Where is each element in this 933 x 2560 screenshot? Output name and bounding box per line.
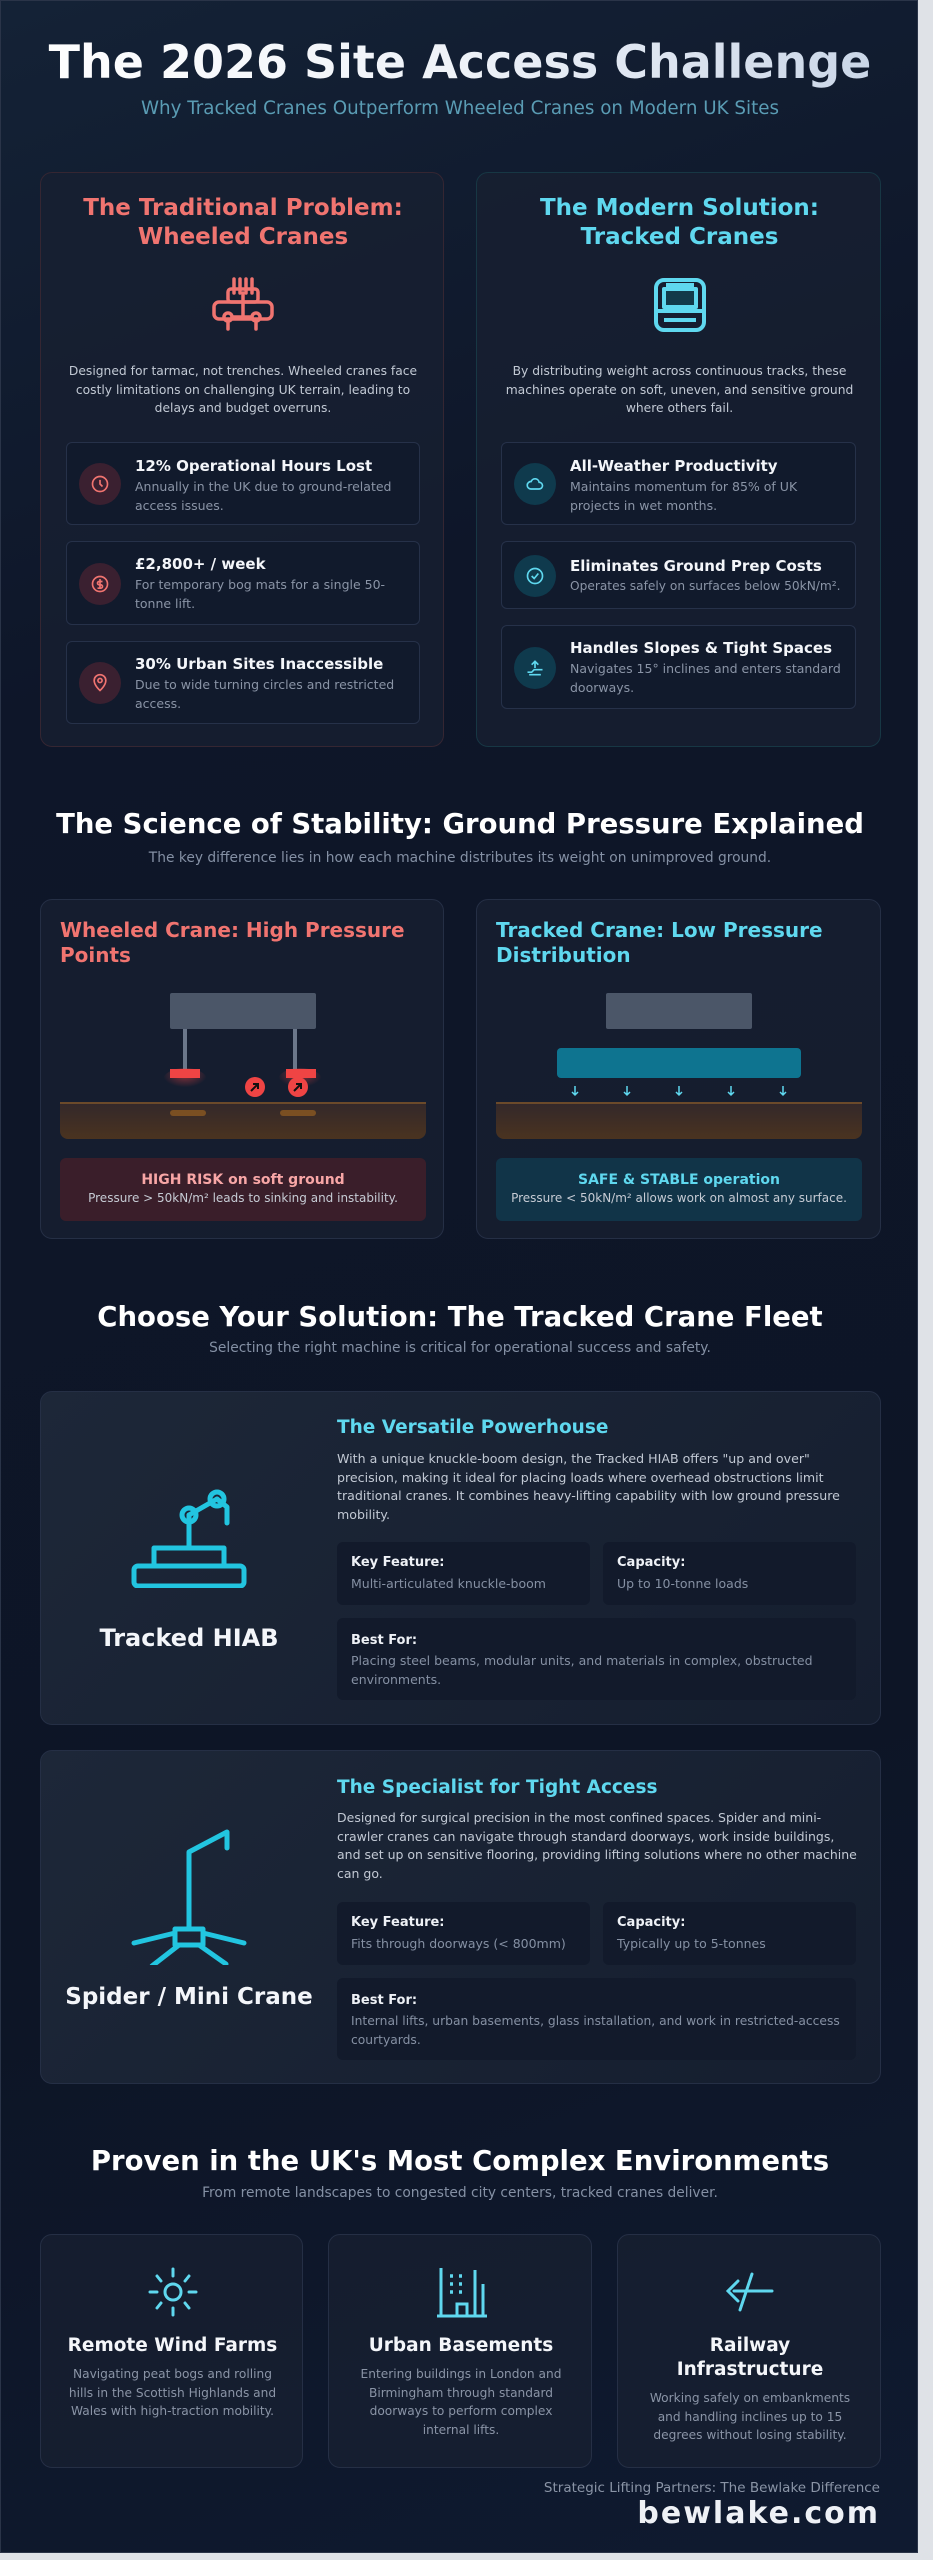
heading: fleet: Choose Your Solution: The Tracked Crane Fleet (97, 1301, 823, 1333)
spec box: capacity: Up to 10-tonne loads (617, 1576, 748, 1591)
diagram: tracked crane distribution (496, 993, 862, 1139)
spec box: best for: Best For: (351, 1993, 417, 2008)
spec box: best for (337, 1978, 856, 2060)
spec box: best for: Best For: (351, 1633, 417, 1648)
subheading: environments: From remote landscapes to congested city centers, tracked cranes deliver. (202, 2185, 718, 2201)
callout: safe and stable: Pressure < 50kN/m² allows work on almost any surface. (511, 1191, 847, 1205)
heading: modern solution: Tracked Cranes (581, 224, 778, 250)
text: railway: Working safely on embankments and handling inclines up to 15 degrees without losing stability. (650, 2391, 850, 2442)
callout: high risk: HIGH RISK on soft ground (141, 1172, 345, 1188)
heading: versatile powerhouse: The Versatile Powerhouse (337, 1417, 608, 1438)
panel: railway infrastructure (617, 2234, 881, 2468)
benefit card: slopes: Navigates 15° inclines and enters standard doorways. (570, 661, 841, 695)
benefit card: ground prep: Operates safely on surfaces below 50kN/m². (570, 579, 841, 593)
label: Tracked HIAB: Tracked HIAB (99, 1624, 278, 1652)
callout: high risk: Pressure > 50kN/m² leads to sinking and instability. (88, 1191, 398, 1205)
text: urban basements: Entering buildings in London and Birmingham through standard doorways to perform complex internal lifts. (361, 2367, 561, 2436)
text: HIAB description: With a unique knuckle-boom design, the Tracked HIAB offers "up and over" precision, making it ideal for placing loads where overhead obstructions limit traditional cranes. It combines heavy-lifting capability with low ground pressure mobility. (337, 1451, 840, 1522)
heading: tracked low pressure (496, 918, 823, 967)
stat card: bog mats cost: For temporary bog mats for a single 50-tonne lift. (135, 577, 385, 611)
panel: wheeled pressure diagram (40, 899, 444, 1239)
spec box: capacity: Typically up to 5-tonnes (617, 1936, 766, 1951)
icon: check (514, 555, 556, 597)
icon: wheeled crane (212, 277, 274, 331)
stat card: hours lost: 12% Operational Hours Lost (135, 457, 372, 475)
icon: cloud (514, 463, 556, 505)
callout: high risk (60, 1158, 426, 1221)
spec box: capacity: Capacity: (617, 1555, 685, 1570)
benefit card: all-weather: Maintains momentum for 85% of UK projects in wet months. (570, 479, 797, 513)
diagram: wheeled crane outriggers (60, 993, 426, 1139)
label: Spider / Mini Crane: Spider / Mini Crane (65, 1984, 313, 2010)
heading: science of stability: The Science of Stability: Ground Pressure Explained (56, 808, 864, 840)
title: wind farms: Remote Wind Farms (68, 2335, 277, 2356)
title: railway (677, 2335, 823, 2380)
benefit card: all-weather: All-Weather Productivity (570, 457, 778, 475)
stat card: bog mats cost (66, 541, 420, 625)
benefit card: all-weather (501, 442, 856, 525)
text: spider description: Designed for surgical precision in the most confined spaces. Spider and mini-crawler cranes can navigate through standard doorways, work inside buildings, and set up on sensitive flooring, providing lifting solutions where no other machine can go. (337, 1810, 857, 1881)
heading: tracked low pressure: Tracked Crane: Low Pressure (496, 918, 823, 942)
heading: traditional problem: Wheeled Cranes (138, 224, 348, 250)
spec box: best for: Placing steel beams, modular units, and materials in complex, obstructed environments. (351, 1653, 813, 1686)
icon: knuckle boom crane (132, 1490, 246, 1588)
heading: tight access specialist: The Specialist for Tight Access (337, 1777, 657, 1798)
spec box: key feature: Key Feature: (351, 1555, 445, 1570)
footer brand: bewlake.com (637, 2496, 880, 2531)
icon: location pin (79, 662, 121, 704)
title: railway: Infrastructure (677, 2359, 823, 2380)
panel: tracked pressure diagram (476, 899, 881, 1239)
heading: wheeled high pressure: Points (60, 943, 131, 967)
benefit card: slopes: Handles Slopes & Tight Spaces (570, 639, 832, 657)
icon: sun (148, 2268, 198, 2316)
panel: wheeled cranes problem (40, 172, 444, 747)
benefit card: slopes (501, 625, 856, 709)
text: problem description: Designed for tarmac, not trenches. Wheeled cranes face costly limitations on challenging UK terrain, leading to delays and budget overruns. (69, 364, 417, 415)
callout: safe and stable (496, 1158, 862, 1221)
panel: urban basements (328, 2234, 592, 2468)
heading: wheeled high pressure: Wheeled Crane: High Pressure (60, 918, 405, 942)
spec box: capacity (603, 1902, 856, 1965)
spec box: key feature: Key Feature: (351, 1915, 445, 1930)
icon: railway (726, 2272, 774, 2312)
icon: spider crane (132, 1830, 246, 1965)
footer tagline: Strategic Lifting Partners: The Bewlake Difference (544, 2480, 880, 2496)
heading: wheeled high pressure (60, 918, 405, 967)
spec box: key feature: Fits through doorways (< 800mm) (351, 1936, 566, 1951)
panel: tracked HIAB (40, 1391, 881, 1725)
benefit card: ground prep (501, 541, 856, 609)
heading: modern solution: The Modern Solution: (540, 195, 819, 221)
subtitle: Why Tracked Cranes Outperform Wheeled Cranes on Modern UK Sites (141, 98, 779, 119)
icon: clock (79, 463, 121, 505)
stat card: bog mats cost: £2,800+ / week (135, 555, 266, 573)
heading: modern solution (540, 195, 819, 250)
heading: proven environments: Proven in the UK's Most Complex Environments (91, 2145, 829, 2177)
icon: tracked crane (654, 278, 706, 332)
stat card: hours lost: Annually in the UK due to ground-related access issues. (135, 479, 391, 513)
stat card: hours lost (66, 442, 420, 525)
heading: traditional problem (83, 195, 403, 250)
spec box: best for (337, 1618, 856, 1700)
spec box: capacity (603, 1542, 856, 1605)
subheading: science: The key difference lies in how each machine distributes its weight on unimproved ground. (149, 850, 771, 866)
spec box: best for: Internal lifts, urban basements, glass installation, and work in restricted-access courtyards. (351, 2014, 840, 2046)
icon: building (437, 2268, 487, 2318)
callout: safe and stable: SAFE & STABLE operation (578, 1172, 780, 1188)
spec box: capacity: Capacity: (617, 1915, 685, 1930)
icon: money (79, 563, 121, 605)
heading: tracked low pressure: Distribution (496, 943, 631, 967)
heading: traditional problem: The Traditional Problem: (83, 195, 403, 221)
icon: slope (514, 647, 556, 689)
spec box: key feature (337, 1542, 590, 1605)
stat card: urban sites: Due to wide turning circles and restricted access. (135, 677, 394, 711)
text: wind farms: Navigating peat bogs and rolling hills in the Scottish Highlands and Wales with high-traction mobility. (69, 2367, 276, 2418)
stat card: urban sites: 30% Urban Sites Inaccessible (135, 655, 383, 673)
subheading: fleet: Selecting the right machine is critical for operational success and safety. (209, 1340, 711, 1356)
panel: spider mini crane (40, 1750, 881, 2084)
title: railway: Railway (710, 2335, 790, 2356)
panel: remote wind farms (40, 2234, 303, 2468)
stat card: urban sites (66, 641, 420, 724)
title: The 2026 Site Access Challenge (49, 35, 871, 89)
spec box: key feature (337, 1902, 590, 1965)
title: urban basements: Urban Basements (369, 2335, 553, 2356)
panel: tracked cranes solution (476, 172, 881, 747)
spec box: key feature: Multi-articulated knuckle-boom (351, 1576, 546, 1591)
text: solution description: By distributing weight across continuous tracks, these machines operate on soft, uneven, and sensitive ground where others fail. (506, 364, 853, 415)
benefit card: ground prep: Eliminates Ground Prep Costs (570, 557, 822, 575)
